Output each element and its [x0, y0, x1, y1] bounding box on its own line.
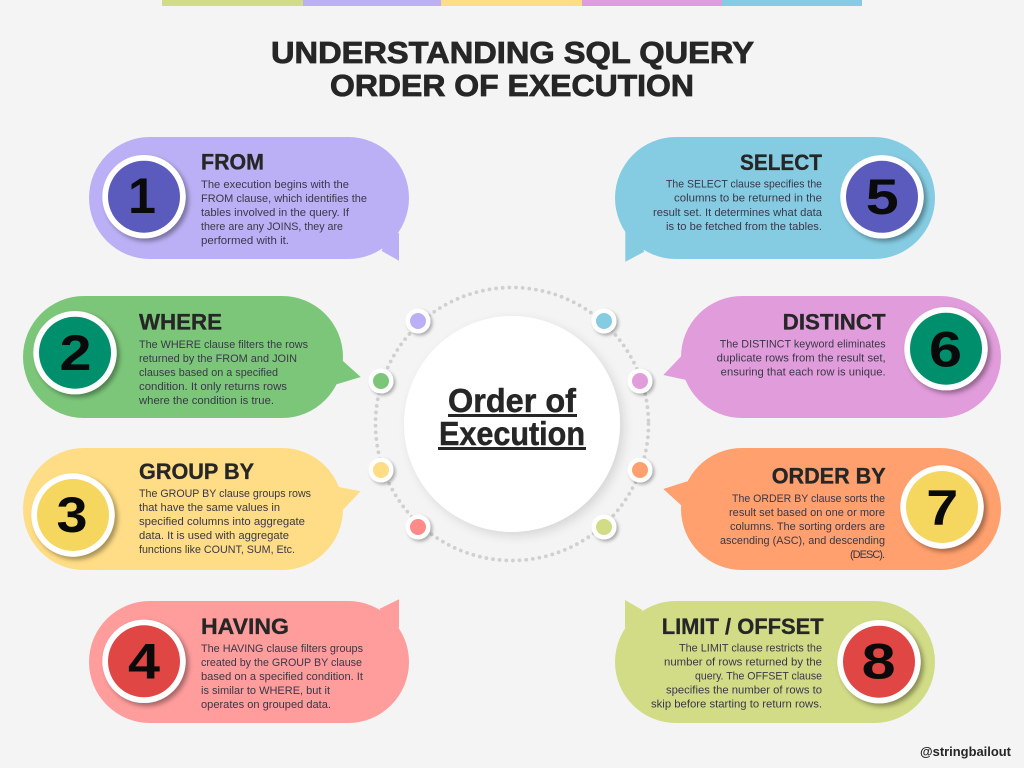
description: GROUP BY: The GROUP BY clause groups rows [139, 488, 311, 500]
panel: 2 WHERE [23, 296, 361, 418]
centre circle: Order of Execution: Execution [439, 415, 585, 452]
panel: 7 ORDER BY [663, 448, 1001, 570]
description: ORDER BY: result set based on one or more [729, 507, 885, 519]
heading: DISTINCT: DISTINCT [783, 310, 886, 335]
panel: 5 SELECT [615, 137, 935, 262]
description: WHERE: condition. It only returns rows [139, 381, 288, 393]
description: LIMIT / OFFSET: specifies the number of rows to [666, 685, 822, 697]
ring node: lime [592, 514, 616, 540]
description: ORDER BY [720, 493, 885, 561]
description: FROM: FROM clause, which identifies the [201, 193, 367, 205]
ring node: yellow [368, 458, 394, 482]
title: UNDERSTANDING SQL QUERY [271, 36, 754, 70]
title [271, 36, 754, 103]
number badge 7 [900, 465, 984, 549]
title: ORDER OF EXECUTION [330, 69, 694, 103]
ring node: orange [628, 458, 652, 482]
description: WHERE: clauses based on a specified [139, 367, 278, 379]
description: DISTINCT: ensuring that each row is unique. [721, 367, 886, 379]
description: GROUP BY [139, 488, 311, 556]
description: WHERE: returned by the FROM and JOIN [139, 353, 297, 365]
number badge 6 [904, 307, 988, 390]
panel: 4 HAVING [89, 599, 409, 723]
panel: 8 LIMIT / OFFSET [615, 600, 935, 723]
description: HAVING: is similar to WHERE, but it [201, 685, 330, 697]
description: ORDER BY: ascending (ASC), and descending [720, 535, 885, 547]
description: WHERE: where the condition is true. [138, 395, 274, 407]
description: DISTINCT: duplicate rows from the result set, [717, 353, 886, 365]
panel: 1 FROM [89, 137, 409, 261]
heading: HAVING: HAVING [201, 614, 289, 639]
heading: GROUP BY: GROUP BY [139, 459, 254, 484]
number badge 1: 1 [128, 168, 156, 224]
description: SELECT: The SELECT clause specifies the [666, 179, 822, 191]
description: SELECT [653, 179, 823, 233]
description: LIMIT / OFFSET: skip before starting to return rows. [651, 699, 822, 711]
description: HAVING: The HAVING clause filters groups [201, 643, 363, 655]
description: LIMIT / OFFSET: The LIMIT clause restricts the [679, 643, 822, 655]
description: LIMIT / OFFSET: number of rows returned by the [664, 657, 822, 669]
description: FROM: The execution begins with the [201, 179, 349, 191]
number badge 5: 5 [866, 169, 899, 225]
description: SELECT: is to be fetched from the tables. [666, 221, 822, 233]
heading: LIMIT / OFFSET: LIMIT / OFFSET [662, 614, 824, 639]
number badge 1 [102, 155, 186, 238]
number badge 2 [33, 311, 117, 394]
description: HAVING [201, 643, 363, 711]
number badge 7: 7 [926, 480, 958, 536]
description: ORDER BY: The ORDER BY clause sorts the [732, 493, 885, 505]
number badge 4: 4 [128, 633, 160, 689]
description: WHERE: The WHERE clause filters the rows [139, 339, 308, 351]
description: GROUP BY: that have the same values in [139, 502, 280, 514]
number badge 6: 6 [929, 322, 962, 378]
description: FROM: there are any JOINS, they are [201, 221, 343, 233]
description: LIMIT / OFFSET [651, 643, 822, 711]
panel: 6 DISTINCT [663, 296, 1001, 418]
ring node: purple [406, 308, 430, 334]
description: SELECT: columns to be returned in the [674, 193, 822, 205]
ring node: green [368, 368, 394, 394]
number badge 8: 8 [862, 634, 896, 690]
description: FROM [201, 179, 367, 247]
ring node: blue [592, 308, 616, 334]
credit handle: @stringbailout [920, 744, 1012, 759]
panel: 3 GROUP BY [23, 448, 361, 570]
heading: WHERE: WHERE [139, 310, 222, 335]
description: WHERE [138, 339, 308, 407]
heading: FROM: FROM [201, 149, 264, 174]
description: SELECT: result set. It determines what data [653, 207, 823, 219]
description: ORDER BY: (DESC). [850, 549, 885, 561]
description: HAVING: operates on grouped data. [201, 699, 331, 711]
description: GROUP BY: data. It is used with aggregate [139, 530, 289, 542]
heading: SELECT: SELECT [740, 150, 823, 175]
description: FROM: performed with it. [201, 235, 289, 247]
centre circle: Order of Execution: Order of [448, 382, 577, 419]
description: HAVING: based on a specified condition. It [201, 671, 363, 683]
number badge 3: 3 [56, 487, 88, 543]
description: GROUP BY: functions like COUNT, SUM, Etc. [139, 544, 295, 556]
description: FROM: tables involved in the query. If [201, 207, 350, 219]
ring node: pink [628, 368, 652, 394]
centre circle: Order of Execution [404, 316, 620, 532]
description: HAVING: created by the GROUP BY clause [201, 657, 362, 669]
number badge 8 [837, 620, 921, 703]
description: DISTINCT [717, 339, 886, 379]
description: GROUP BY: specified columns into aggregate [139, 516, 305, 528]
dotted ring [376, 288, 648, 560]
number badge 5 [840, 155, 924, 238]
number badge 4 [102, 620, 186, 703]
description: DISTINCT: The DISTINCT keyword eliminates [720, 339, 886, 351]
ring node: red [406, 514, 430, 540]
top colour bar [162, 0, 862, 6]
description: ORDER BY: columns. The sorting orders are [730, 521, 885, 533]
number badge 3 [31, 473, 115, 557]
number badge 2: 2 [60, 325, 92, 381]
heading: ORDER BY: ORDER BY [772, 464, 886, 489]
description: LIMIT / OFFSET: query. The OFFSET clause [695, 671, 822, 683]
